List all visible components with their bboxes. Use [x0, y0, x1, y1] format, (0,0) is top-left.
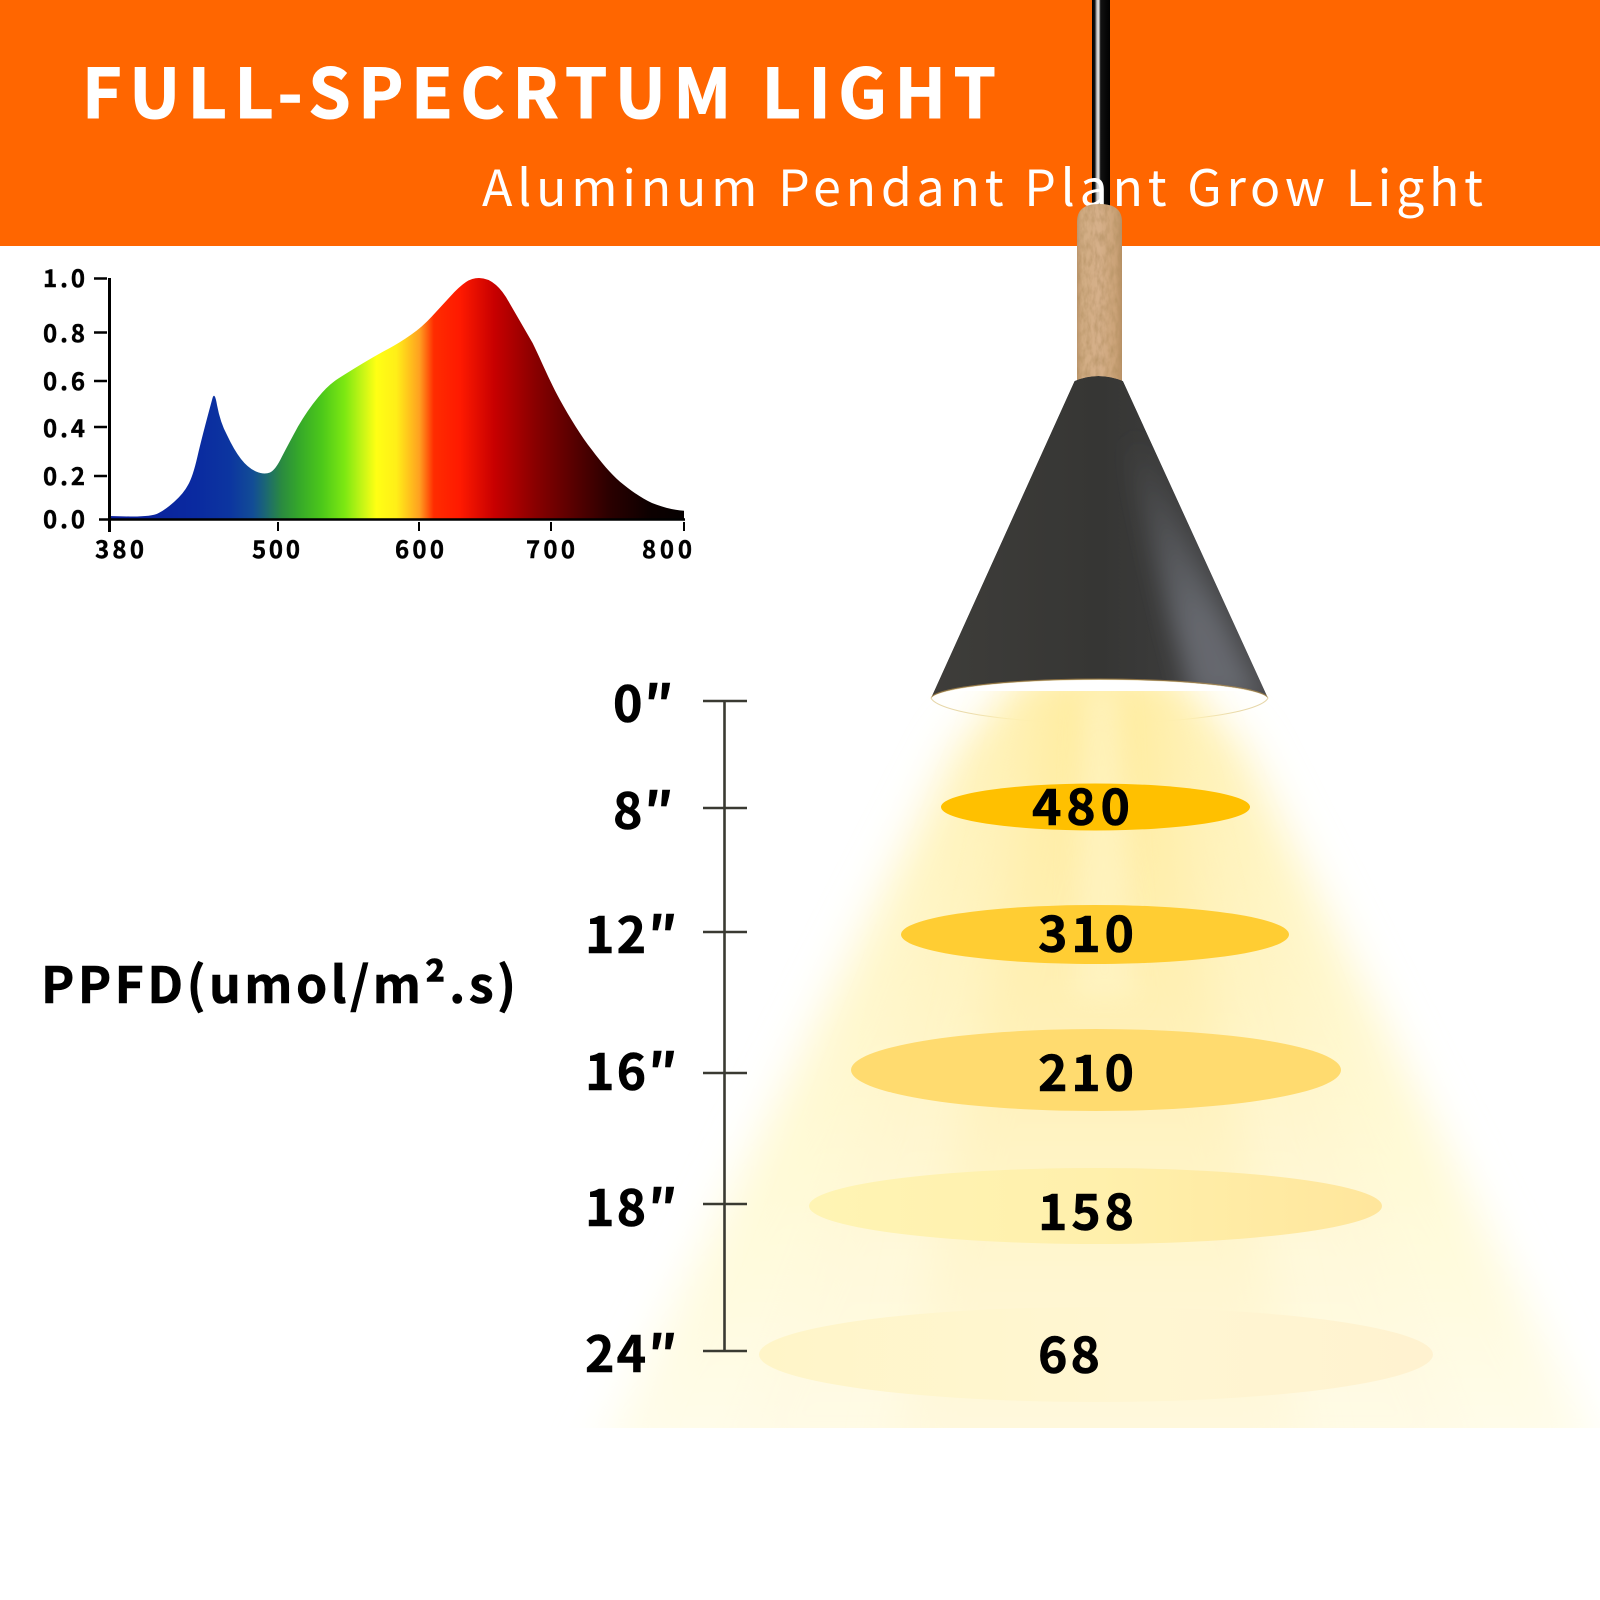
distance scale: [703, 701, 747, 1351]
PPFD ellipse: 18 inch: [809, 1168, 1382, 1244]
PPFD values: 310: [1038, 895, 1134, 967]
distance labels: 8″: [613, 772, 673, 844]
lamp shade: [931, 376, 1268, 700]
spectrum curve: [109, 278, 684, 520]
y axis labels: 0.8: [43, 314, 85, 349]
PPFD values: 480: [1032, 768, 1130, 840]
PPFD values: 68: [1038, 1316, 1100, 1388]
y axis labels: 0.4: [43, 409, 85, 444]
pendant cord: [1092, 0, 1110, 208]
x axis labels: 700: [526, 530, 575, 565]
distance labels: [585, 665, 677, 1387]
PPFD values: 158: [1038, 1173, 1134, 1245]
distance labels: 0″: [613, 665, 673, 737]
wood socket: [1077, 204, 1122, 384]
distance labels: 12″: [585, 896, 677, 968]
y axis labels: [43, 259, 85, 535]
y axis labels: 0.6: [43, 362, 85, 397]
x axis labels: 800: [642, 530, 692, 565]
lamp inner opening: [931, 680, 1268, 723]
axes: [94, 278, 685, 532]
x axis labels: [95, 530, 692, 565]
title: FULL-SPECRTUM LIGHT: [82, 39, 996, 138]
y axis labels: 1.0: [43, 259, 85, 294]
x axis labels: 500: [252, 530, 300, 565]
light beam: [590, 680, 1600, 1470]
PPFD ellipse: 12 inch: [901, 905, 1289, 964]
y axis labels: 0.0: [43, 500, 85, 535]
x axis labels: 380: [95, 530, 144, 565]
PPFD unit label: PPFD(umol/m².s): [41, 946, 516, 1018]
distance labels: 16″: [585, 1033, 677, 1105]
distance labels: 24″: [585, 1315, 677, 1387]
PPFD ellipse: 8 inch: [941, 784, 1250, 830]
subtitle: Aluminum Pendant Plant Grow Light: [482, 149, 1483, 221]
x axis labels: 600: [395, 530, 444, 565]
spectrum chart: [43, 259, 692, 565]
PPFD ellipse: 24 inch: [759, 1307, 1433, 1402]
header banner: [0, 0, 1600, 246]
pendant lamp: [931, 204, 1268, 700]
PPFD values: 210: [1038, 1034, 1134, 1106]
PPFD ellipse: 16 inch: [851, 1029, 1341, 1111]
y axis labels: 0.2: [43, 457, 85, 492]
PPFD values: [1032, 768, 1134, 1388]
distance labels: 18″: [585, 1169, 677, 1241]
